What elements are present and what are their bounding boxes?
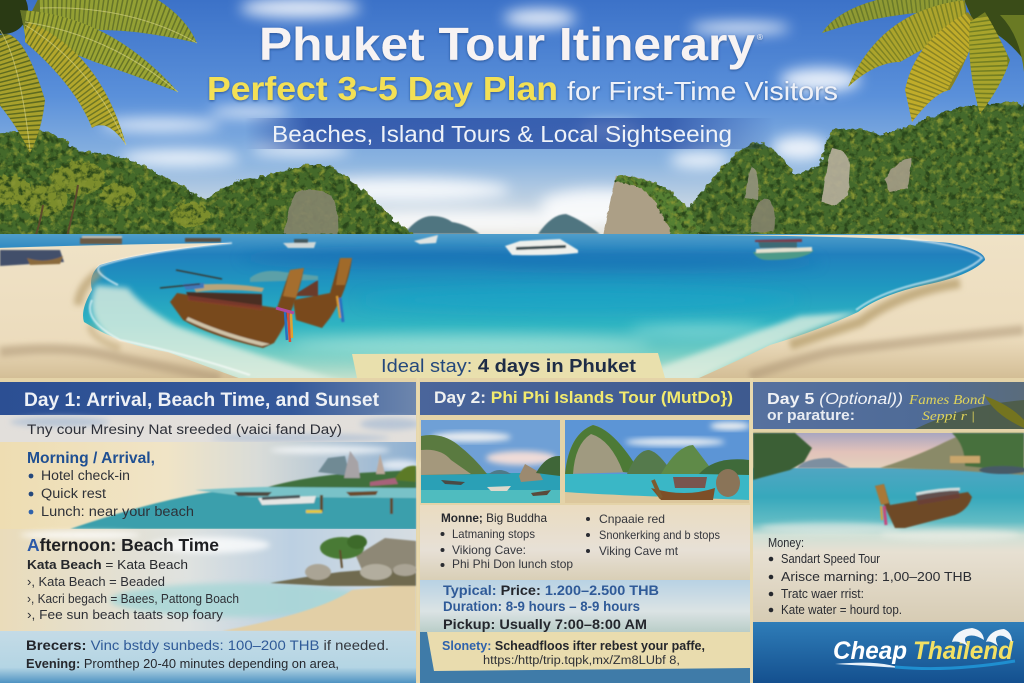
day 2 price details: Pickup: Usually 7:00–8:00 AM <box>443 616 647 632</box>
evening block: Evening: Promthep 20-40 minutes depending on area, <box>26 656 339 671</box>
boat ribbons <box>276 308 294 342</box>
right cliffs <box>745 148 912 232</box>
left forest hills <box>0 131 414 244</box>
left wet sand and shadows <box>0 272 220 378</box>
distant islands <box>404 214 600 234</box>
tagline band <box>245 118 775 149</box>
day 5 heading: or parature: <box>767 407 855 424</box>
palm fronds top right <box>822 0 1024 122</box>
right beach <box>690 235 1024 382</box>
day 2 activities: Viking Cave mt <box>599 544 679 558</box>
day 2 money note: Slonety: Scheadfloos ifter rebest your paffe, <box>442 638 705 653</box>
day 2 activities: Vikiong Cave: <box>452 543 526 557</box>
logo: Cheap Thailend <box>833 628 1015 669</box>
day 2 activities: Latmaning stops <box>452 527 535 541</box>
afternoon block: ›, Kata Beach = Beaded <box>27 575 165 589</box>
right forest hills <box>600 103 1024 240</box>
day 2 price details: Duration: 8-9 hours – 8-9 hours <box>443 599 640 614</box>
beached boats and sunbeds <box>0 236 221 266</box>
longtail boat, rear <box>250 258 352 328</box>
day 5 heading: Day 5 (Optional)) <box>767 391 903 408</box>
photo: longtail boat with activity list: Kate water = hourd top. <box>781 603 902 617</box>
photo: left island view <box>421 420 560 503</box>
afternoon block: ›, Kacri begach = Baees, Pattong Boach <box>27 592 239 606</box>
day 2 money note <box>420 632 750 683</box>
photo: longtail boat with activity list: Sandart Speed Tour <box>781 552 880 566</box>
evening block: Brecers: Vinc bstdy sunbeds: 100–200 THB if needed. <box>26 637 389 653</box>
icon: palm wings <box>952 628 1012 646</box>
photo: longtail boat with activity list <box>753 433 1024 622</box>
right wet sand and shadows <box>750 283 1024 376</box>
panel: day 1 <box>0 382 420 683</box>
morning block: Quick rest <box>41 486 106 501</box>
sea footer <box>753 622 1024 683</box>
morning block: Lunch: near your beach <box>41 504 194 519</box>
evening block <box>0 631 416 683</box>
morning block <box>0 442 420 529</box>
tagline band: Beaches, Island Tours & Local Sightseeing <box>272 121 732 147</box>
left cliff face <box>284 190 338 234</box>
panel: day 5 <box>753 382 1024 683</box>
subtitle: plan: for First-Time Visitors <box>567 76 838 106</box>
logo: Cheap Thailend: Cheap <box>833 637 907 665</box>
palm fronds top left <box>0 0 197 153</box>
day 2 heading <box>420 382 750 415</box>
left beach <box>0 243 250 382</box>
photo: right limestone and boat <box>565 420 749 503</box>
day 2 activities: Monne; Big Buddha <box>441 511 547 525</box>
speed boats <box>283 235 814 260</box>
day 2 heading: Day 2: Phi Phi Islands Tour (MutDo}) <box>434 389 733 407</box>
day 2 activities: Cnpaaie red <box>599 512 665 526</box>
right surf foam <box>856 238 982 310</box>
title: ® <box>757 33 763 42</box>
photo: longtail boat with activity list: Money: <box>768 536 804 550</box>
afternoon block: ›, Fee sun beach taats sop foary <box>27 608 224 622</box>
limestone rock <box>603 176 700 236</box>
ideal stay banner: Ideal stay: 4 days in Phuket <box>381 356 636 376</box>
dividers <box>418 378 752 683</box>
shallow pale water by the shores <box>91 285 860 382</box>
afternoon block: Afternoon: Beach Time <box>27 535 219 555</box>
sea <box>0 234 1024 380</box>
photo: longtail boat with activity list: Arisce marning: 1,00–200 THB <box>781 569 972 584</box>
ideal stay banner <box>352 353 665 378</box>
day 5 heading <box>753 382 1024 429</box>
day 2 activities: Snonkerking and b stops <box>599 528 720 542</box>
day 1 intro strip <box>0 415 420 442</box>
day 1 intro strip: Tny cour Mresiny Nat sreeded (vaici fand Day) <box>27 422 342 437</box>
subtitle: plan: Perfect 3~5 Day Plan <box>207 70 558 107</box>
panel: day 2 <box>420 382 750 683</box>
day 2 money note: https:/http/trip.tqpk,mx/Zm8LUbf 8, <box>483 655 680 667</box>
afternoon block: Kata Beach = Kata Beach <box>27 558 188 572</box>
longtail boat, front <box>160 268 304 348</box>
day 1 heading: Day 1: Arrival, Beach Time, and Sunset <box>24 389 379 411</box>
day 5 heading: Fames Bond <box>908 393 986 408</box>
beach palms <box>0 161 210 227</box>
day 1 heading <box>0 382 416 415</box>
day 2 activities: Phi Phi Don lunch stop <box>452 557 573 571</box>
left surf foam <box>90 243 250 375</box>
title: Phuket Tour Itinerary <box>259 18 755 70</box>
clouds <box>100 0 860 232</box>
day 2 price details: Typical: Price: 1.200–2.500 THB <box>443 582 659 598</box>
day 5 heading: Seppi r | <box>922 408 975 423</box>
day 2 price details <box>420 580 750 632</box>
morning block: Hotel check-in <box>41 468 130 483</box>
logo: Cheap Thailend: Thailend <box>913 637 1014 665</box>
subtitle: plan <box>207 70 838 107</box>
lower section backdrop <box>0 378 1024 683</box>
photo: longtail boat with activity list: Tratc waer rrist: <box>781 587 864 601</box>
afternoon block <box>0 529 417 631</box>
morning block: Morning / Arrival, <box>27 450 155 467</box>
day 2 activities <box>420 505 750 580</box>
hero scene: tropical bay <box>0 0 1024 382</box>
